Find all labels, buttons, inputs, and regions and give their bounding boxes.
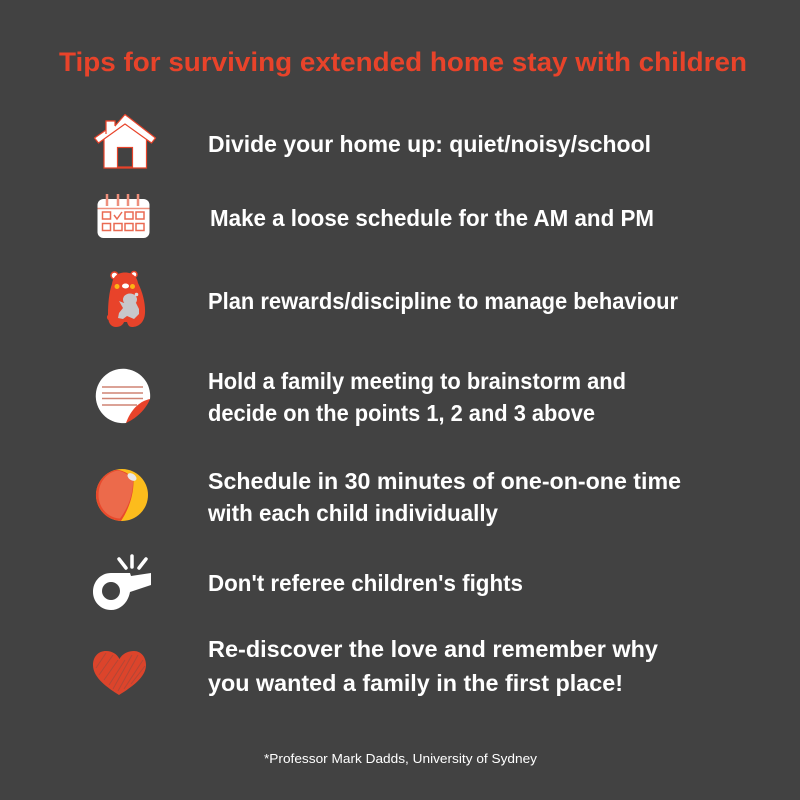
text: tip 1: Divide your home up: quiet/noisy/school <box>208 131 651 157</box>
text: tip 7: Re-discover the love and remember why <box>208 636 658 662</box>
title: Tips for surviving extended home stay with children <box>59 47 747 77</box>
icon: house <box>94 114 156 168</box>
icon: scribbled heart <box>93 651 146 695</box>
text: tip 5 <box>207 468 681 526</box>
text: tip 2: Make a loose schedule for the AM and PM <box>210 205 654 231</box>
text: tip 4: decide on the points 1, 2 and 3 above <box>208 400 595 426</box>
text: tip 3: Plan rewards/discipline to manage behaviour <box>208 288 678 314</box>
text: tip 7 <box>208 636 658 696</box>
icon: beach ball <box>96 469 148 521</box>
text: tip 4 <box>208 368 626 426</box>
text: tip 6: Don't referee children's fights <box>208 570 523 596</box>
icon: calendar <box>98 194 150 238</box>
icon: whistle <box>93 556 151 610</box>
text: tip 5: Schedule in 30 minutes of one-on-one time <box>208 468 681 494</box>
text: tip 5: with each child individually <box>207 500 498 526</box>
icon: bear holding teddy <box>107 272 145 327</box>
icon: note sticker <box>96 369 150 423</box>
text: tip 7: you wanted a family in the first place! <box>208 670 623 696</box>
text: tip 4: Hold a family meeting to brainstorm and <box>208 368 626 394</box>
attribution: *Professor Mark Dadds, University of Sydney <box>264 752 538 766</box>
